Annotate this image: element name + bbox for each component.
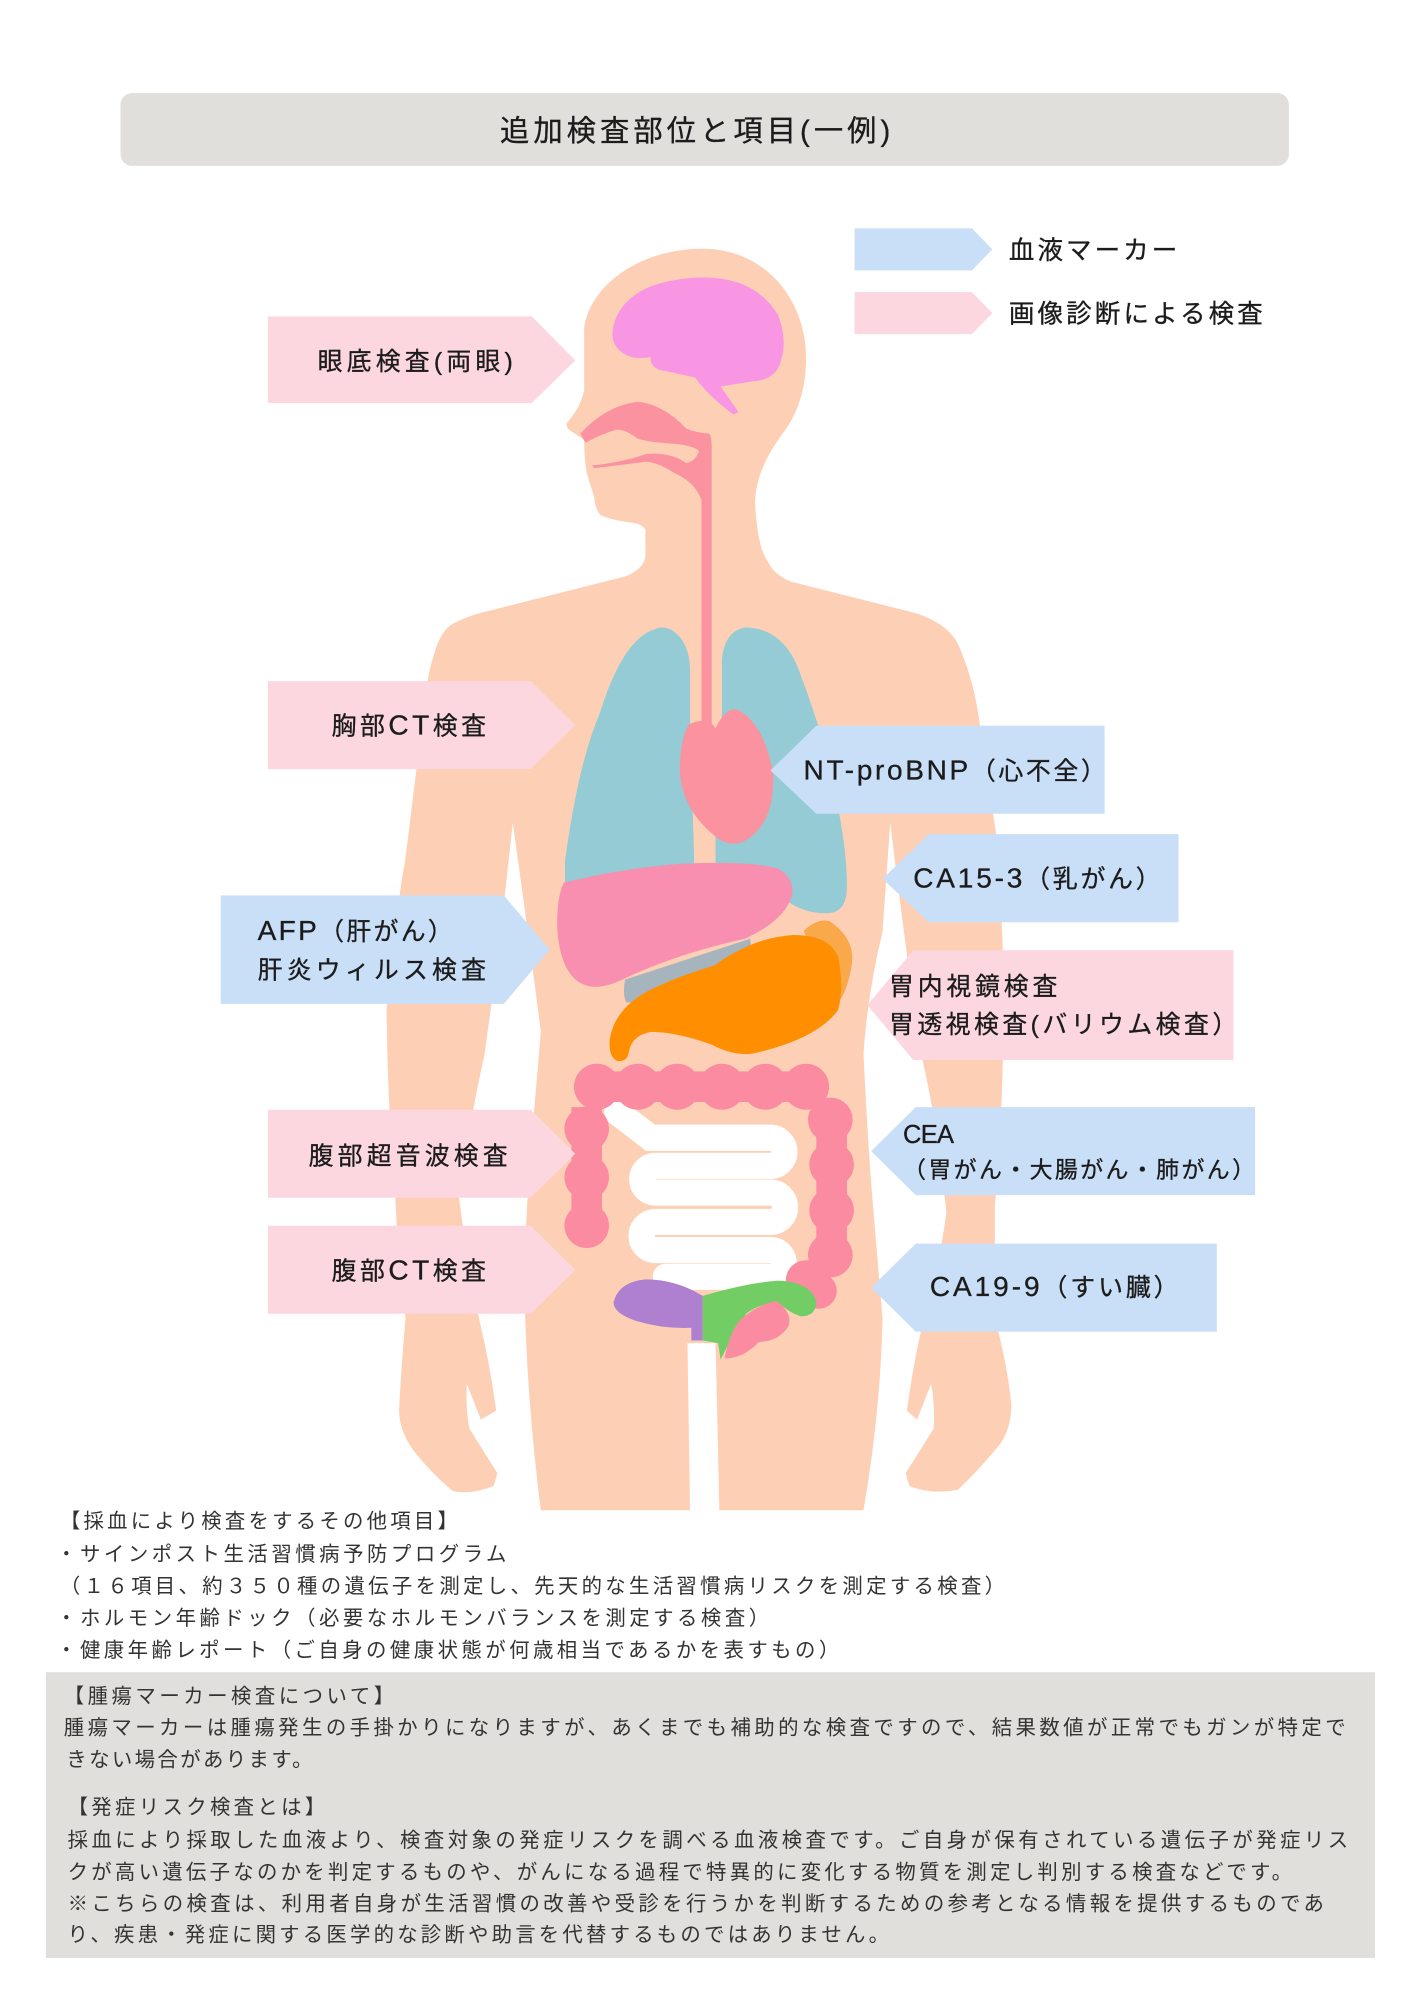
anatomy illustration [386, 249, 1011, 1510]
label: NT-proBNP [770, 726, 1106, 814]
body: risk tests: クが高い遺伝子なのかを判定するものや、がんになる過程で特異的に変化する物質を測定し判別する検査などです。 [68, 1861, 1292, 1884]
body: tumor markers: きない場合があります。 [66, 1749, 312, 1772]
label: abdominal CT: 腹部CT検査 [332, 1254, 486, 1285]
left lung [565, 628, 695, 893]
small intestine [617, 1112, 785, 1277]
liver [557, 863, 792, 987]
body silhouette [386, 249, 1011, 1510]
label: CEA: （胃がん・大腸がん・肺がん） [903, 1156, 1255, 1182]
heading: risk tests: 【発症リスク検査とは】 [68, 1796, 325, 1819]
label: CEA [871, 1107, 1255, 1195]
appendix area purple [614, 1279, 703, 1341]
label: AFP and hepatitis [221, 895, 550, 1004]
bladder area green [703, 1281, 816, 1360]
text block: other blood tests: ・サインポスト生活習慣病予防プログラム [56, 1543, 506, 1566]
large intestine [564, 1064, 854, 1309]
right lung [716, 628, 847, 913]
text block: other blood tests: （１６項目、約３５０種の遺伝子を測定し、先天的な生活習慣病リスクを測定する検査） [60, 1575, 1005, 1598]
label: CEA: CEA [903, 1121, 954, 1149]
label: AFP and hepatitis: 肝炎ウィルス検査 [258, 956, 486, 984]
body: risk tests: ※こちらの検査は、利用者自身が生活習慣の改善や受診を行うかを判断するための参考となる情報を提供するものであ [68, 1893, 1324, 1916]
label: fundus exam: 眼底検査(両眼) [318, 348, 513, 376]
title bar [121, 93, 1289, 166]
label: CA15-3: CA15-3（乳がん） [913, 863, 1161, 894]
label: CA15-3 [883, 834, 1179, 922]
label: AFP and hepatitis: AFP（肝がん） [258, 915, 453, 946]
panel: tumor marker and risk test notes [46, 1672, 1375, 1958]
label: abdominal CT [268, 1226, 575, 1314]
text block: other blood tests: ・ホルモン年齢ドック（必要なホルモンバランスを測定する検査） [56, 1607, 769, 1630]
label: CA19-9 [871, 1244, 1217, 1332]
stomach [610, 935, 841, 1061]
body: risk tests: り、疾患・発症に関する医学的な診断や助言を代替するものではありません。 [68, 1923, 889, 1946]
legend: 画像診断による検査 [1009, 301, 1263, 329]
body: tumor markers [64, 1717, 1346, 1772]
legend [855, 228, 1263, 334]
heading: tumor markers: 【腫瘍マーカー検査について】 [64, 1685, 394, 1708]
airway and esophagus [580, 402, 712, 730]
body: risk tests: 採血により採取した血液より、検査対象の発症リスクを調べる血液検査です。ご自身が保有されている遺伝子が発症リス [68, 1829, 1348, 1852]
pancreas [804, 920, 852, 1001]
label: fundus exam [268, 316, 575, 403]
text block: other blood tests: ・健康年齢レポート（ご自身の健康状態が何歳相当であるかを表すもの） [56, 1639, 839, 1662]
gallbladder [624, 939, 753, 1003]
label: gastroscopy: 胃内視鏡検査 [889, 973, 1057, 1001]
label: chest CT [268, 681, 575, 769]
label: abdominal ultrasound: 腹部超音波検査 [309, 1143, 508, 1171]
label: gastroscopy [867, 950, 1237, 1060]
brain [612, 278, 784, 415]
title bar: 追加検査部位と項目(一例) [500, 115, 890, 148]
label: gastroscopy: 胃透視検査(バリウム検査） [889, 1011, 1237, 1039]
heart [680, 709, 773, 844]
label: NT-proBNP: NT-proBNP（心不全） [804, 754, 1106, 785]
text block: other blood tests: 【採血により検査をするその他項目】 [60, 1510, 458, 1533]
label: chest CT: 胸部CT検査 [332, 710, 486, 741]
text block: other blood tests [56, 1510, 1005, 1662]
label: abdominal ultrasound [268, 1110, 575, 1198]
label: CA19-9: CA19-9（すい臓） [930, 1271, 1179, 1302]
body: tumor markers: 腫瘍マーカーは腫瘍発生の手掛かりになりますが、あくまでも補助的な検査ですので、結果数値が正常でもガンが特定で [64, 1717, 1346, 1740]
body: risk tests [68, 1829, 1348, 1946]
sigmoid colon [724, 1301, 789, 1358]
legend: 血液マーカー [1009, 237, 1177, 265]
